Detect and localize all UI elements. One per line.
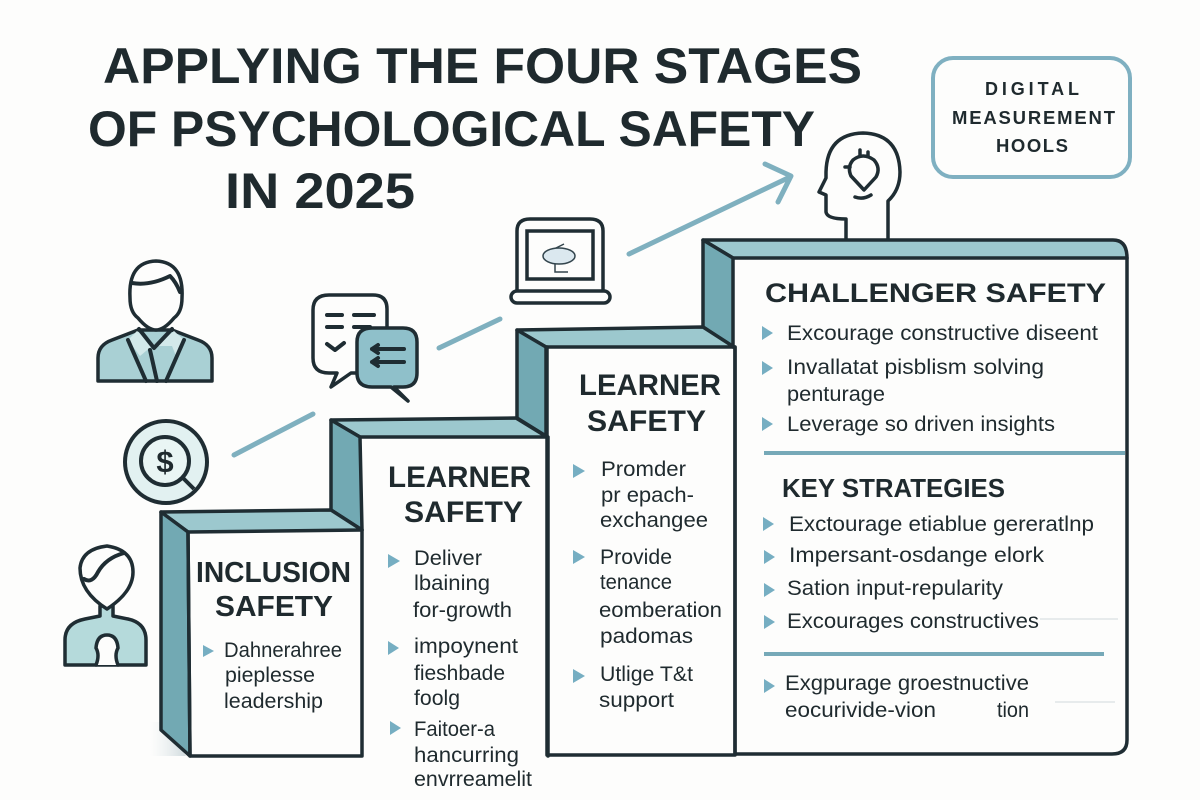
icon: head with lightbulb [819,133,900,240]
callout: digital measurement tools: MEASUREMENT [952,107,1116,128]
icon: person in suit [98,261,212,381]
heading: learner safety lower: SAFETY [404,496,523,529]
panel: inclusion safety step [150,510,362,756]
panel: learner safety step upper [517,327,735,755]
heading: key strategies: KEY STRATEGIES [782,473,1005,503]
list: challenger actions [762,322,1098,436]
list: challenger actions: Excourage constructive diseent [787,322,1098,345]
list: inclusion actions: Dahnerahree [224,639,342,662]
heading: learner safety upper [579,369,721,438]
list: learner upper actions: Promder [601,458,686,481]
list: learner lower actions: foolg [414,687,460,710]
list: learner lower actions: impoynent [414,635,518,658]
panel: challenger safety step [703,240,1127,754]
heading: learner safety lower [388,461,531,529]
list: key strategies [763,513,1094,633]
heading: inclusion safety [196,557,351,623]
list: learner upper actions: pr epach- [601,484,694,507]
list: learner upper actions: Utlige T&t [600,663,693,686]
heading: inclusion safety: INCLUSION [196,557,351,589]
heading: learner safety lower: LEARNER [388,461,531,494]
list: challenger actions: penturage [787,383,885,406]
list: key strategies: Excourages constructives [787,610,1039,633]
list: learner lower actions: envrreamelit [414,768,532,791]
title: IN 2025 [225,163,415,219]
list: challenger actions: Leverage so driven insights [787,413,1055,436]
heading: challenger safety: CHALLENGER SAFETY [765,278,1106,308]
list: learner lower actions: hancurring [414,744,519,767]
list: learner upper actions [573,458,722,712]
callout: digital measurement tools: DIGITAL [985,79,1079,99]
list: key strategies: Exctourage etiablue gereratlnp [789,513,1094,536]
list: learner lower actions: Deliver [414,547,482,570]
icon: dollar magnifier [125,421,207,503]
list: inclusion actions: leadership [224,690,323,713]
icon: chat bubbles [313,295,417,401]
list: learner lower actions: fieshbade [414,662,505,685]
title: OF PSYCHOLOGICAL SAFETY [88,101,815,157]
list: learner lower actions: lbaining [414,572,490,595]
heading: learner safety upper: SAFETY [587,405,706,438]
list: key strategies: Sation input-repularity [787,577,1004,600]
title [88,38,862,219]
heading: learner safety upper: LEARNER [579,369,721,402]
list: closing point [764,672,1029,722]
callout: digital measurement tools [933,58,1130,177]
list: inclusion actions: pieplesse [225,664,315,687]
callout: digital measurement tools: HOOLS [996,135,1068,156]
list: learner upper actions: tenance [600,571,672,594]
list: key strategies: Impersant-osdange elork [789,544,1045,567]
panel: learner safety step lower [331,418,548,791]
list: learner upper actions: padomas [600,625,693,648]
list: challenger actions: Invallatat pisblism solving [787,356,1044,379]
icon: laptop [511,219,610,303]
icon: person outline [65,546,146,665]
list: closing point: Exgpurage groestnuctive [785,672,1029,695]
arrow: growth trajectory [234,164,791,455]
list: learner upper actions: exchangee [600,509,708,532]
list: learner lower actions: for-growth [413,599,512,622]
list: learner upper actions: support [599,689,674,712]
list: closing point: eocurivide-vion [785,699,936,722]
list: learner upper actions: Provide [600,546,672,569]
icon: dollar magnifier: $ [156,444,174,479]
list: learner lower actions [388,547,532,791]
list: closing point: tion [997,699,1029,722]
list: learner lower actions: Faitoer-a [414,718,495,741]
list: learner upper actions: eomberation [599,599,722,622]
title: APPLYING THE FOUR STAGES [103,38,862,94]
heading: inclusion safety: SAFETY [215,591,333,623]
list: inclusion actions [203,639,342,713]
